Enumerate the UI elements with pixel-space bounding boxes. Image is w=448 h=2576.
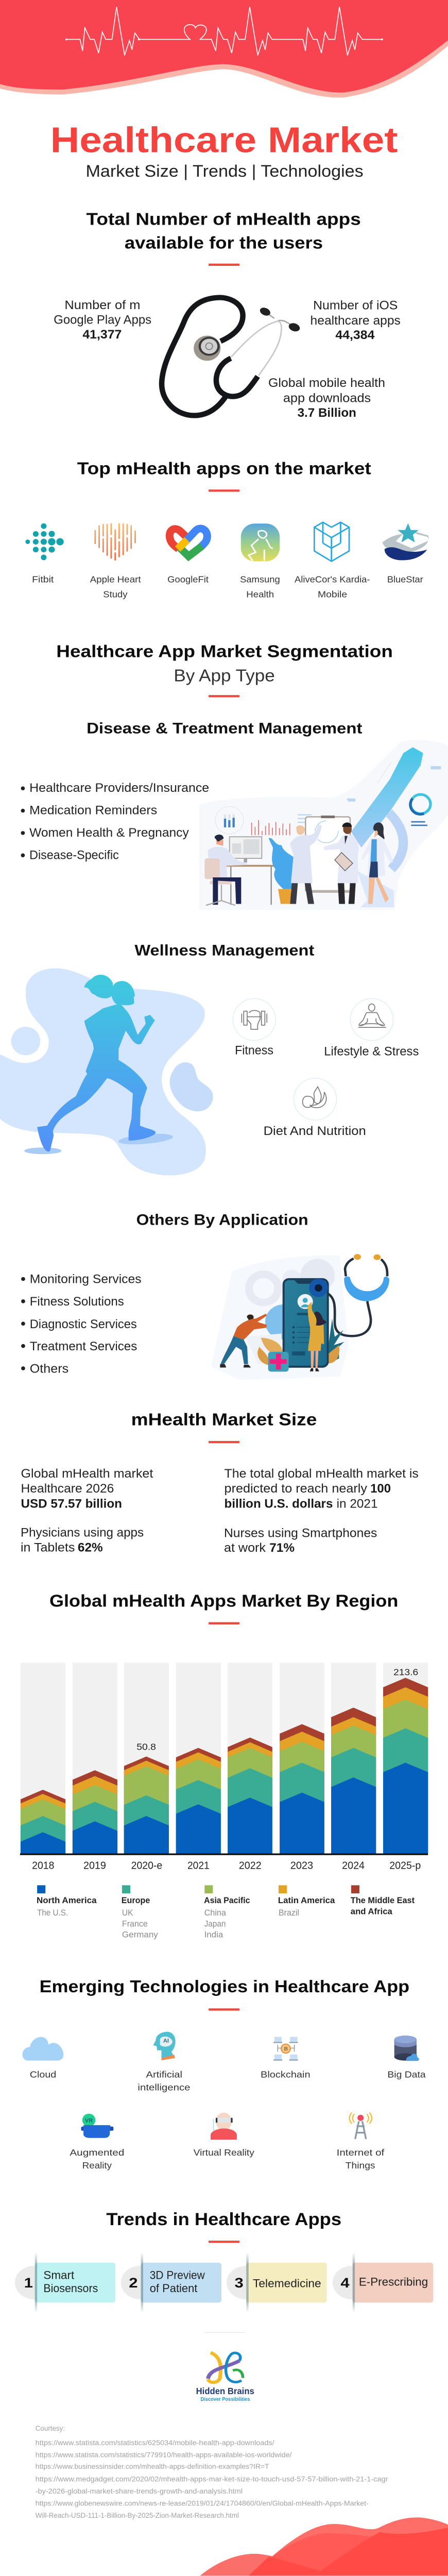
technologies grid: Blockchain (261, 2070, 311, 2080)
trend 4: 4 (340, 2276, 350, 2291)
app labels: Mobile (318, 589, 347, 599)
icon: AI head: AI (163, 2038, 169, 2044)
logo: Hidden Brains (196, 2332, 254, 2402)
courtesy links: Courtesy: (36, 2425, 65, 2433)
list: disease and treatment: Women Health & Pregnancy (29, 826, 189, 840)
list: others (21, 1273, 142, 1376)
stats left: Healthcare 2026 (21, 1482, 114, 1496)
year labels: 2024 (342, 1860, 365, 1871)
stat: Google Play apps: Number of m (64, 298, 140, 312)
year labels: 2021 (187, 1860, 210, 1871)
stat: iOS apps: 44,384 (335, 328, 375, 342)
legend: Europe (122, 1895, 150, 1905)
heading: total number of apps (87, 210, 361, 266)
icon: internet of things (349, 2112, 372, 2139)
value labels (136, 1667, 418, 1752)
legend: Asia Pacific (204, 1895, 250, 1905)
wellness: fitness: Fitness (235, 1044, 273, 1058)
stats left: Global mHealth market (21, 1467, 153, 1481)
heading: trends: Trends in Healthcare Apps (106, 2209, 341, 2229)
stat: iOS apps: Number of iOS (313, 299, 398, 312)
stats right: at work (224, 1541, 266, 1555)
augmented reality label (70, 2147, 124, 2171)
stats left: 62% (78, 1541, 103, 1554)
legend: Japan (204, 1919, 226, 1928)
icon: Apple Heart (95, 524, 135, 560)
heading: disease and treatment: Disease & Treatment Management (87, 720, 363, 737)
stats left: Physicians using apps (21, 1526, 144, 1539)
app labels: AliveCor's Kardia- (295, 574, 370, 585)
title: Healthcare Market (50, 120, 398, 160)
legend: The U.S. (37, 1908, 68, 1918)
app labels: Samsung (240, 574, 280, 585)
heading: top apps: Top mHealth apps on the market (77, 459, 371, 478)
legend: UK (122, 1908, 133, 1918)
legend: Germany (122, 1930, 158, 1940)
list: others: Monitoring Services (30, 1273, 142, 1286)
trend 2: of Patient (150, 2282, 198, 2295)
courtesy links: -by-2026-global-market-share-trends-growth-and-analysis.html (36, 2487, 243, 2496)
app labels: Health (246, 589, 274, 599)
list: disease and treatment: Healthcare Providers/Insurance (29, 781, 209, 795)
heading: trends (106, 2209, 341, 2243)
stats right: predicted to reach nearly (225, 1482, 368, 1496)
bar 2024 (331, 1708, 376, 1854)
bar 2021 (176, 1748, 221, 1854)
legend: China (204, 1908, 226, 1918)
year labels: 2019 (83, 1860, 106, 1871)
heading: segmentation: By App Type (174, 666, 275, 685)
value labels: 50.8 (136, 1742, 156, 1752)
courtesy links: https://www.medgadget.com/2020/02/mhealth-apps-mar-ket-size-to-touch-usd-57-57-billion-with-21-1-cagr (36, 2476, 388, 2483)
bar 2022 (228, 1738, 272, 1854)
stats left: USD 57.57 billion (21, 1497, 122, 1511)
trend cards (15, 2252, 433, 2313)
list: others: Others (30, 1362, 68, 1376)
person at desk (204, 835, 278, 905)
list: disease and treatment: Medication Reminders (29, 804, 157, 817)
trend 1: Biosensors (43, 2282, 98, 2295)
footer waves (200, 2517, 448, 2575)
year labels: 2018 (32, 1860, 54, 1871)
legend (37, 1885, 415, 1940)
trend 4: E-Prescribing (359, 2276, 428, 2289)
illustration: phone with stethoscope (211, 1254, 389, 1380)
trend 2: 2 (129, 2276, 138, 2291)
doctor walking (361, 822, 393, 904)
heartbeat line (65, 7, 383, 55)
illustration: doctors and microscope (199, 740, 448, 910)
icon: blockchain: B (284, 2046, 288, 2052)
technologies grid: Cloud (30, 2070, 56, 2080)
year labels: 2022 (239, 1860, 262, 1871)
internet of things label: Internet of (337, 2147, 385, 2158)
list: others: Diagnostic Services (30, 1317, 137, 1331)
woman (308, 1302, 326, 1371)
courtesy links: https://www.globenewswire.com/news-re-lease/2019/01/24/1704860/0/en/Global-mHealth-Apps-Market- (36, 2500, 369, 2507)
technologies grid: Big Data (387, 2070, 426, 2080)
app labels (32, 574, 423, 599)
stat: iOS apps: healthcare apps (311, 314, 401, 328)
courtesy links: https://www.statista.com/statistics/779910/health-apps-available-ios-worldwide/ (36, 2451, 292, 2459)
stat: downloads (268, 376, 385, 420)
bar 2025-p (383, 1678, 428, 1854)
icon: augmented reality (81, 2114, 113, 2138)
icon: stethoscope (162, 298, 301, 416)
icon: AliveCor (314, 522, 349, 561)
augmented reality label: Reality (82, 2160, 112, 2171)
app row (25, 522, 429, 599)
heading: segmentation (56, 642, 393, 697)
year labels: 2025-p (389, 1860, 421, 1871)
icon: AI head (153, 2032, 176, 2060)
icon: virtual reality (211, 2112, 237, 2140)
icon: Fitbit (25, 523, 64, 560)
legend: The Middle East (351, 1895, 415, 1905)
augmented reality label: Augmented (70, 2147, 124, 2158)
stats right: 100 (370, 1482, 391, 1496)
stat: downloads: 3.7 Billion (298, 406, 356, 420)
bar 2019 (73, 1770, 117, 1854)
internet of things label: Things (346, 2160, 375, 2171)
artificial intelligence label: Artificial (146, 2070, 182, 2080)
icon: cloud (23, 2037, 63, 2061)
list: disease and treatment (21, 781, 209, 862)
icon: Samsung Health (241, 523, 280, 561)
stat: downloads: Global mobile health (268, 376, 385, 390)
icon: big data (394, 2036, 419, 2061)
stat: Google Play apps (54, 298, 151, 342)
doctor pointing (323, 822, 359, 904)
heading: emerging technologies (40, 1977, 409, 2011)
trend 2 (121, 2252, 221, 2313)
trend 1: 1 (24, 2276, 33, 2291)
icon: GoogleFit (169, 529, 207, 556)
wellness: lifestyle (324, 998, 419, 1058)
year labels: 2023 (290, 1860, 313, 1871)
heading: region: Global mHealth Apps Market By Region (49, 1591, 398, 1611)
list: others: Treatment Services (30, 1340, 137, 1353)
bar 2020-e (124, 1756, 169, 1854)
trend 1: Smart (43, 2269, 75, 2282)
legend: and Africa (351, 1907, 392, 1917)
icon: blockchain (273, 2037, 298, 2060)
illustration: runner (0, 968, 213, 1175)
trend 2: 3D Preview (150, 2269, 205, 2282)
icon: augmented reality: VR (85, 2118, 93, 2124)
stats right (224, 1467, 419, 1555)
trend 3 (227, 2252, 327, 2313)
trend 3: 3 (235, 2276, 244, 2291)
trend 4 (333, 2252, 433, 2313)
stat: Google Play apps: Google Play Apps (54, 313, 151, 327)
legend: France (122, 1919, 148, 1928)
app labels: Study (103, 589, 127, 599)
list: disease and treatment: Disease-Specific (29, 849, 119, 862)
heading: top apps (77, 459, 371, 492)
value labels: 213.6 (393, 1667, 418, 1677)
heading: total number of apps: Total Number of mHealth apps (87, 210, 361, 229)
stats right: Nurses using Smartphones (224, 1527, 377, 1540)
legend: North America (37, 1895, 97, 1905)
courtesy links: Will-Reach-USD-111-1-Billion-By-2025-Zion-Market-Research.html (36, 2512, 239, 2520)
stats right: 71% (269, 1541, 295, 1555)
technologies grid (23, 2032, 426, 2171)
legend: Latin America (278, 1895, 335, 1905)
artificial intelligence label (137, 2070, 191, 2093)
internet of things label (337, 2147, 385, 2171)
legend: India (204, 1930, 223, 1940)
year labels (32, 1860, 421, 1871)
man pushing (220, 1314, 267, 1367)
bar 2023 (280, 1724, 324, 1854)
list: others: Fitness Solutions (30, 1295, 124, 1309)
logo: Hidden Brains: Hidden Brains (196, 2386, 254, 2396)
year labels: 2020-e (131, 1860, 162, 1871)
heading: region (49, 1591, 398, 1624)
doctor with back turned (290, 824, 322, 904)
stats left (21, 1467, 153, 1554)
trend 3: Telemedicine (253, 2277, 321, 2290)
subtitle: Market Size | Trends | Technologies (85, 161, 364, 180)
courtesy links: https://www.businessinsider.com/mhealth-apps-definition-examples?IR=T (36, 2463, 269, 2471)
heading: market size (131, 1410, 317, 1443)
artificial intelligence label: intelligence (137, 2082, 191, 2093)
stats right: billion U.S. dollars (225, 1497, 333, 1511)
heading: total number of apps: available for the users (125, 233, 323, 252)
stats right: The total global mHealth market is (225, 1467, 419, 1481)
plant (269, 838, 294, 904)
heading: others: Others By Application (136, 1212, 308, 1228)
header banner (0, 0, 448, 97)
wellness: diet (264, 1078, 366, 1138)
heading: market size: mHealth Market Size (131, 1410, 317, 1429)
wellness: fitness (233, 998, 275, 1058)
stats right: in 2021 (337, 1497, 378, 1511)
courtesy links (36, 2425, 388, 2520)
stat: Google Play apps: 41,377 (82, 328, 122, 342)
heading: segmentation: Healthcare App Market Segmentation (56, 642, 393, 661)
heading: emerging technologies: Emerging Technologies in Healthcare App (40, 1977, 409, 1996)
logo: Hidden Brains: Discover Possibilities (201, 2397, 250, 2402)
bar 2018 (21, 1790, 65, 1854)
trend 1 (15, 2252, 115, 2313)
heading: wellness: Wellness Management (134, 942, 314, 959)
app labels: BlueStar (387, 574, 423, 585)
stat: downloads: app downloads (283, 392, 371, 405)
wellness: lifestyle: Lifestyle & Stress (324, 1045, 419, 1058)
app labels: GoogleFit (167, 574, 209, 585)
wellness: diet: Diet And Nutrition (264, 1124, 366, 1138)
icon: BlueStar (382, 523, 429, 560)
courtesy links: https://www.statista.com/statistics/625034/mobile-health-app-downloads/ (36, 2439, 274, 2447)
app labels: Apple Heart (90, 574, 141, 585)
app labels: Fitbit (32, 574, 54, 585)
stats left: in Tablets (21, 1541, 75, 1554)
stat: iOS apps (311, 299, 401, 342)
technologies grid: Virtual Reality (194, 2147, 254, 2158)
legend: Brazil (279, 1908, 299, 1918)
stacked bar chart (20, 1663, 428, 1871)
